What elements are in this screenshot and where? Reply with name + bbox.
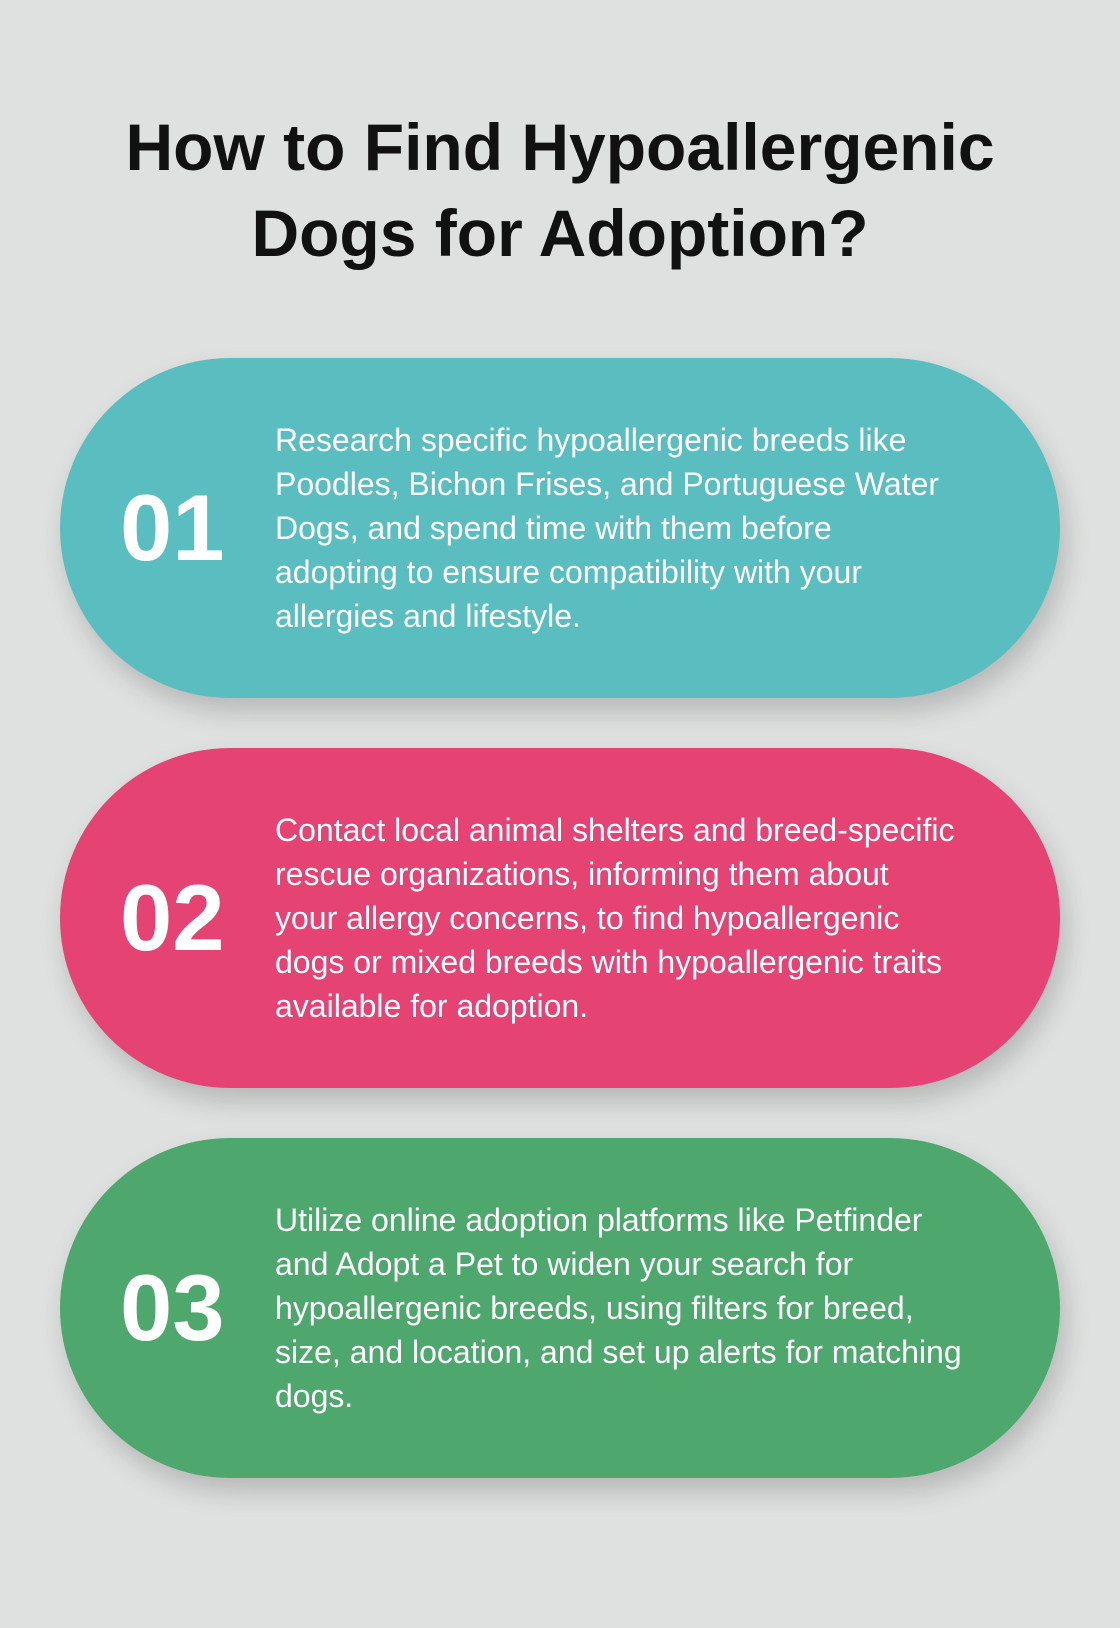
text step 1: Poodles, Bichon Frises, and Portuguese Water xyxy=(275,466,939,502)
text step 3: and Adopt a Pet to widen your search for xyxy=(275,1246,853,1282)
title xyxy=(125,110,995,270)
panel: step 1 xyxy=(60,358,1060,698)
panel: step 2 xyxy=(60,748,1060,1088)
number 01: 01 xyxy=(120,475,225,580)
text step 2: available for adoption. xyxy=(275,988,588,1024)
text step 2 xyxy=(275,812,954,1024)
text step 1: adopting to ensure compatibility with your xyxy=(275,554,862,590)
text step 2: dogs or mixed breeds with hypoallergenic traits xyxy=(275,944,942,980)
text step 3 xyxy=(275,1202,962,1414)
number 03: 03 xyxy=(120,1255,225,1360)
text step 3: Utilize online adoption platforms like Petfinder xyxy=(275,1202,922,1238)
panel: step 3 xyxy=(60,1138,1060,1478)
text step 1: Research specific hypoallergenic breeds like xyxy=(275,422,906,458)
text step 3: dogs. xyxy=(275,1378,353,1414)
number 02: 02 xyxy=(120,865,225,970)
text step 2: rescue organizations, informing them about xyxy=(275,856,889,892)
text step 1 xyxy=(275,422,939,634)
text step 1: allergies and lifestyle. xyxy=(275,598,581,634)
text step 2: Contact local animal shelters and breed-specific xyxy=(275,812,954,848)
title: Dogs for Adoption? xyxy=(251,196,869,270)
title: How to Find Hypoallergenic xyxy=(125,110,995,184)
text step 2: your allergy concerns, to find hypoallergenic xyxy=(275,900,899,936)
text step 1: Dogs, and spend time with them before xyxy=(275,510,832,546)
text step 3: hypoallergenic breeds, using filters for breed, xyxy=(275,1290,914,1326)
text step 3: size, and location, and set up alerts for matching xyxy=(275,1334,962,1370)
